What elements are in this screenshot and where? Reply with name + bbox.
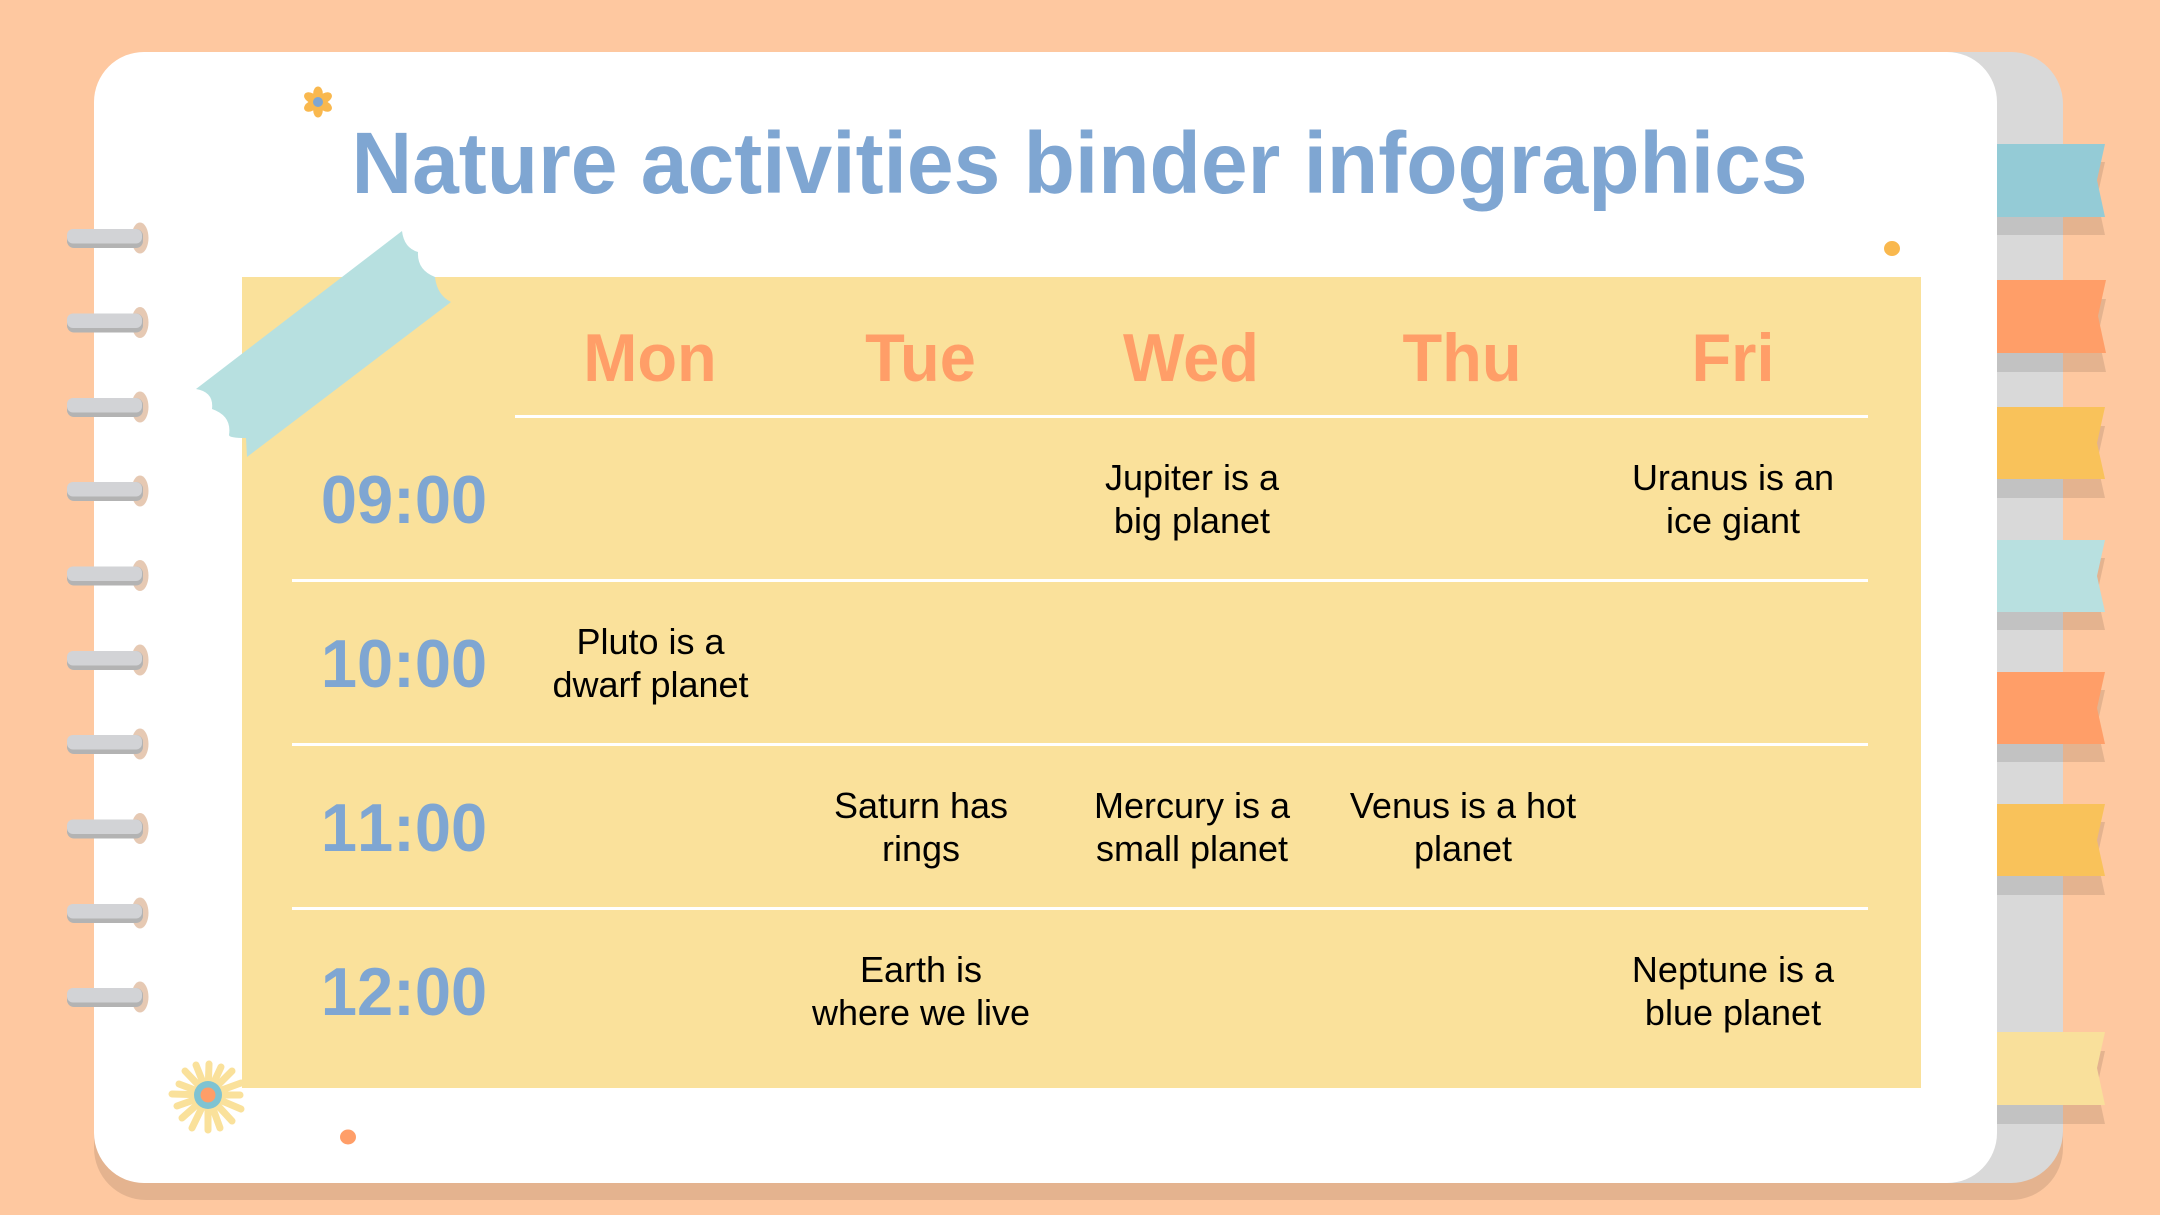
ring 6	[67, 644, 148, 676]
entry: Earth: where we live	[811, 992, 1030, 1033]
entry: Uranus: ice giant	[1666, 500, 1800, 541]
ring 1	[67, 222, 148, 254]
dot: amber	[1884, 241, 1900, 256]
icon: small flower	[302, 86, 334, 118]
ring 5	[67, 560, 148, 591]
ring 9	[67, 898, 148, 928]
entry: Uranus: Uranus is an	[1632, 457, 1834, 498]
tab 6: amber	[1997, 804, 2105, 895]
day headings	[583, 321, 1775, 396]
panel: weekly schedule	[242, 277, 1921, 1088]
binder rings	[67, 222, 148, 1012]
ring 4	[67, 476, 148, 506]
washi tape	[196, 231, 451, 457]
entry: Mercury: Mercury is a	[1094, 785, 1291, 826]
entry: Pluto: Pluto is a	[576, 621, 726, 662]
day headings: Wed	[1123, 321, 1259, 396]
ring 3	[67, 392, 148, 422]
ring 8	[67, 813, 148, 844]
entry: Earth: Earth is	[860, 949, 982, 990]
day headings: Mon	[583, 321, 717, 396]
time labels	[321, 463, 487, 1030]
time labels: 11:00	[321, 791, 487, 866]
entry: Saturn: Saturn has	[834, 785, 1008, 826]
entry: Venus: planet	[1414, 828, 1512, 869]
day headings: Fri	[1691, 321, 1775, 396]
tab 3: amber	[1997, 407, 2105, 498]
entry: Jupiter: big planet	[1114, 500, 1270, 541]
entry: Neptune: blue planet	[1645, 992, 1821, 1033]
grid lines	[292, 416, 1868, 908]
tab 1: teal	[1997, 144, 2105, 235]
icon: sun flower	[172, 1064, 241, 1130]
tab 4: light teal	[1997, 540, 2105, 630]
index tabs	[1997, 144, 2106, 1124]
entry: Venus: Venus is a hot	[1350, 785, 1576, 826]
entry: Pluto: dwarf planet	[552, 664, 749, 705]
day headings: Thu	[1402, 321, 1522, 396]
entry: Jupiter: Jupiter is a	[1105, 457, 1280, 498]
tab 5: orange	[1997, 672, 2105, 762]
time labels: 09:00	[321, 463, 487, 538]
entry: Saturn: rings	[882, 828, 960, 869]
title: Nature activities binder infographics	[351, 116, 1808, 212]
ring 7	[67, 728, 148, 760]
panel background	[242, 277, 1921, 1088]
dot: orange	[340, 1130, 356, 1144]
day headings: Tue	[865, 321, 976, 396]
time labels: 10:00	[321, 627, 487, 702]
binder back cover	[1800, 52, 2063, 1183]
tab 7: pale yellow	[1997, 1032, 2105, 1124]
entry: Neptune: Neptune is a	[1632, 949, 1835, 990]
entry: Mercury: small planet	[1096, 828, 1288, 869]
ring 2	[67, 307, 148, 338]
ring 10	[67, 982, 148, 1012]
time labels: 12:00	[321, 955, 487, 1030]
tab 2: orange	[1997, 280, 2106, 372]
